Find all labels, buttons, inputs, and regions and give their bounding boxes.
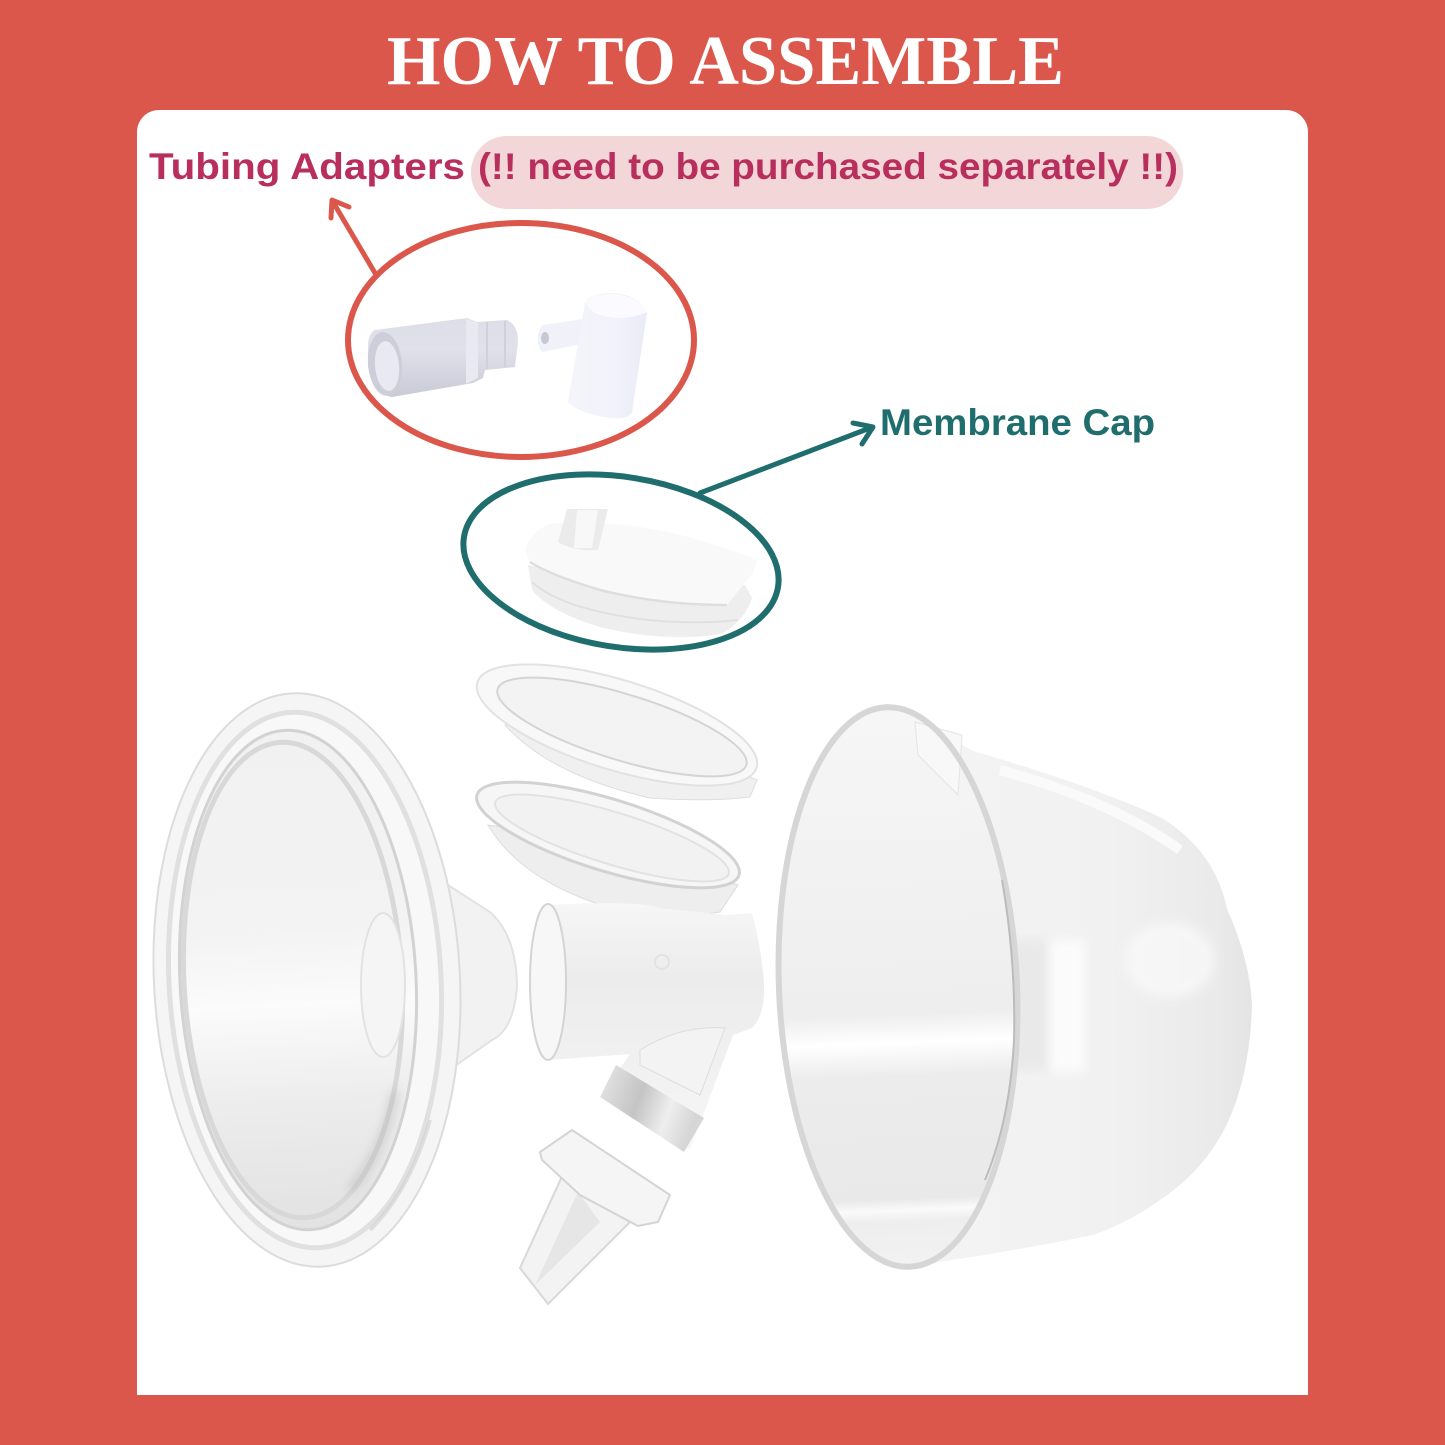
label: purchase note: (!! need to be purchased separately !!) xyxy=(478,146,1178,187)
icon: connector body xyxy=(530,903,764,1152)
title: HOW TO ASSEMBLE xyxy=(387,23,1064,100)
icon: collection cup xyxy=(767,702,1252,1272)
icon: white elbow adapter xyxy=(538,293,647,418)
icon: breast shield flange xyxy=(139,685,517,1275)
icon: membrane cap part xyxy=(525,509,757,637)
ring: tubing adapters xyxy=(348,223,694,457)
label: tubing adapters: Tubing Adapters xyxy=(149,146,465,187)
icon: lower valve membrane xyxy=(466,761,750,916)
label: membrane cap: Membrane Cap xyxy=(880,402,1155,443)
callout: purchase note highlight xyxy=(471,136,1183,209)
arrow: to tubing adapters xyxy=(331,200,375,273)
icon: upper valve membrane xyxy=(464,639,770,811)
ring: membrane cap xyxy=(451,453,791,671)
icon: clear tubing adapter xyxy=(365,318,518,397)
icon: duckbill valve xyxy=(520,1130,670,1304)
arrow: to membrane cap xyxy=(700,423,873,493)
panel: white card xyxy=(137,110,1308,1395)
